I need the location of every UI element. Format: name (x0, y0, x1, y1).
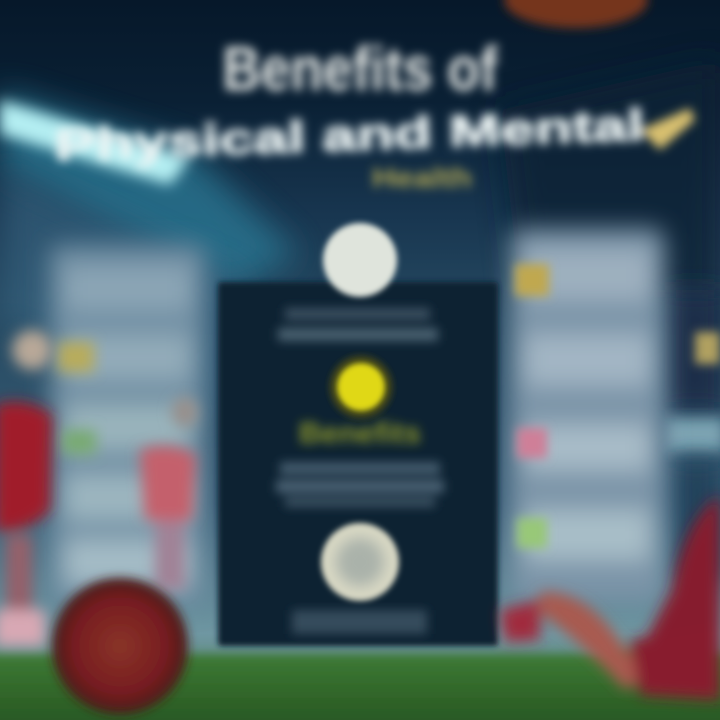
table accents: right (515, 264, 720, 548)
title accent text: Health (372, 162, 472, 193)
icon: top circle (323, 223, 397, 297)
title (54, 35, 695, 170)
grass (0, 654, 720, 720)
panel: right table (510, 228, 665, 603)
icon: bottom circle (321, 523, 399, 601)
icon: yellow circle (329, 355, 393, 419)
player: left (0, 330, 52, 646)
text block: middle (276, 462, 444, 507)
panel: central (218, 223, 498, 646)
text block: top (278, 308, 438, 341)
football at top (504, 0, 648, 28)
football: bottom left (52, 578, 188, 714)
heading: yellow: Benefits (299, 417, 421, 450)
table accents: left (58, 342, 96, 454)
text block: bottom (292, 610, 427, 634)
player: right arm (500, 495, 720, 700)
light streak (0, 100, 190, 185)
player: middle left (140, 397, 198, 590)
panel: left table (50, 245, 205, 605)
title: Benefits of (222, 35, 498, 104)
title: Physical and Mental (54, 101, 645, 170)
